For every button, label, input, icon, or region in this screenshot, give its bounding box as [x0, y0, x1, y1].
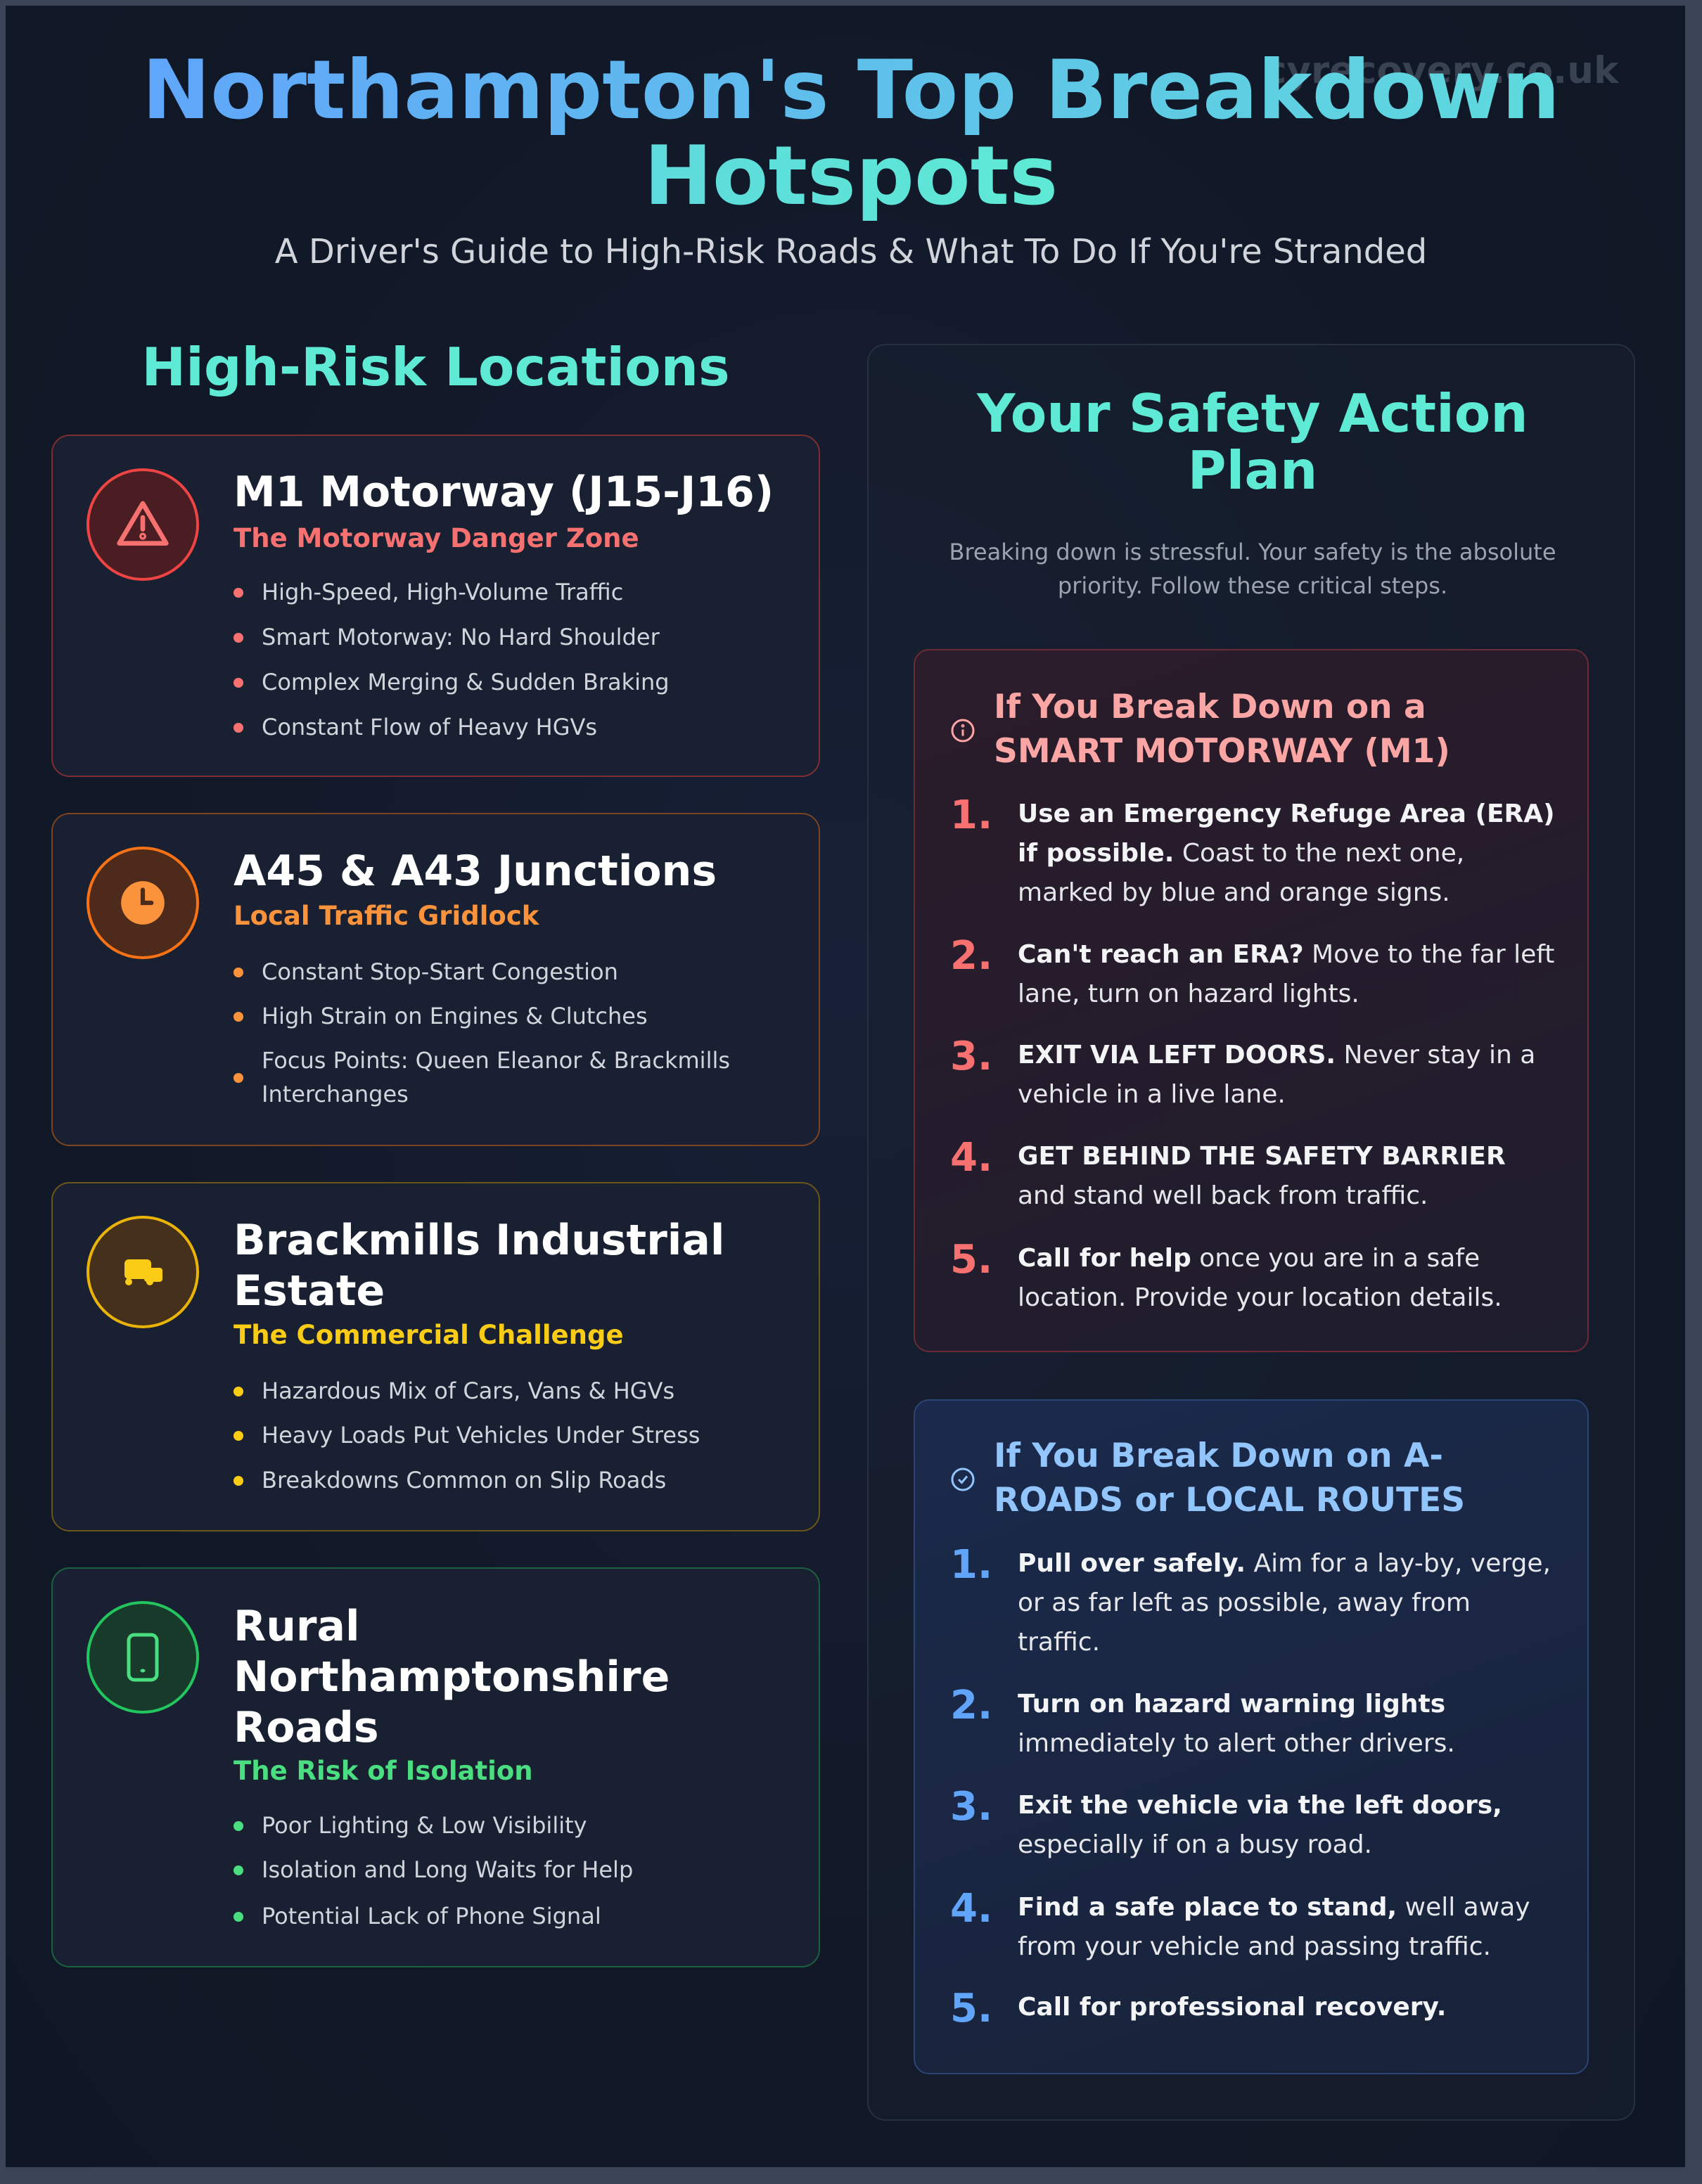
heading: safety plan: Plan	[1188, 439, 1317, 501]
panel: A-roads steps: Turn on hazard warning lights immediately to alert other drivers.	[1018, 1690, 1455, 1758]
description: Breaking down is stressful. Your safety is the absolute priority. Follow these critical steps.	[949, 539, 1556, 599]
panel: A45 & A43	[51, 813, 820, 1146]
panel: A-roads steps: Call for professional recovery.	[1018, 1993, 1446, 2022]
subtitle: A Driver's Guide to High-Risk Roads & What To Do If You're Stranded	[275, 232, 1427, 271]
card title: Brackmills Industrial Estate	[233, 1216, 724, 1316]
panel: A-roads steps: 1.	[950, 1542, 992, 1588]
icon: clock	[87, 847, 199, 959]
panel: M1 motorway	[51, 435, 820, 777]
icon: truck	[87, 1216, 199, 1328]
panel: Brackmills: Hazardous Mix of Cars, Vans & HGVs	[262, 1377, 674, 1404]
panel: Brackmills: Heavy Loads Put Vehicles Under Stress	[262, 1422, 700, 1448]
steps list	[950, 1542, 1551, 2031]
panel: A-roads steps: 2.	[950, 1683, 992, 1728]
panel: Rural roads	[51, 1567, 820, 1967]
panel: smart motorway steps	[914, 649, 1589, 1352]
panel: A-roads steps: 5.	[950, 1986, 992, 2031]
panel: A-roads steps: Find a safe place to stand, well away from your vehicle and passing traffic.	[1018, 1893, 1530, 1961]
steps list	[950, 792, 1555, 1312]
panel: smart motorway steps: Call for help once you are in a safe location. Provide your location details.	[1018, 1244, 1502, 1312]
card subtitle: The Motorway Danger Zone	[233, 523, 639, 553]
card subtitle: The Risk of Isolation	[233, 1756, 533, 1786]
bullet list	[233, 1377, 700, 1494]
heading: high-risk locations: High-Risk Locations	[141, 336, 730, 398]
panel: smart motorway steps: GET BEHIND THE SAFETY BARRIER and stand well back from traffic.	[1018, 1142, 1506, 1210]
title: Hotspots	[644, 129, 1058, 224]
panel: smart motorway steps: EXIT VIA LEFT DOORS. Never stay in a vehicle in a live lane.	[1018, 1041, 1535, 1109]
card subtitle: The Commercial Challenge	[233, 1320, 624, 1350]
panel: smart motorway steps: 5.	[950, 1237, 992, 1283]
card title: A45 & A43 Junctions	[233, 847, 717, 896]
panel: Rural roads: Potential Lack of Phone Signal	[262, 1903, 601, 1929]
icon: info	[951, 719, 975, 743]
card title: Rural Northamptonshire Roads	[233, 1602, 670, 1752]
panel: smart motorway steps: 2.	[950, 933, 992, 979]
panel: Rural roads: Poor Lighting & Low Visibility	[262, 1812, 587, 1839]
panel: M1 motorway: Complex Merging & Sudden Braking	[262, 669, 670, 695]
panel: smart motorway steps: 1.	[950, 792, 992, 838]
panel: A-roads steps	[914, 1399, 1589, 2074]
card title: M1 Motorway (J15-J16)	[233, 468, 774, 517]
title	[142, 43, 1560, 224]
panel: A-roads steps: 4.	[950, 1886, 992, 1932]
icon: check circle	[951, 1468, 975, 1491]
panel: A45 & A43: Focus Points: Queen Eleanor & Brackmills Interchanges	[262, 1047, 730, 1107]
panel: A-roads steps: Exit the vehicle via the left doors, especially if on a busy road.	[1018, 1791, 1502, 1859]
title: Northampton's Top Breakdown	[142, 43, 1560, 138]
panel: A-roads steps: 3.	[950, 1784, 992, 1830]
box heading: If You Break Down on a SMART MOTORWAY (M1)	[994, 688, 1450, 771]
panel: M1 motorway: Constant Flow of Heavy HGVs	[262, 714, 597, 740]
panel: A45 & A43: Constant Stop-Start Congestion	[262, 958, 618, 985]
panel: M1 motorway: High-Speed, High-Volume Traffic	[262, 579, 623, 605]
box heading: If You Break Down on A-ROADS or LOCAL ROUTES	[994, 1437, 1465, 1520]
card subtitle: Local Traffic Gridlock	[233, 901, 539, 931]
bullet list	[233, 579, 670, 740]
panel: smart motorway steps: 3.	[950, 1034, 992, 1079]
bullet list	[233, 958, 730, 1107]
panel: safety action plan	[867, 344, 1635, 2121]
panel: A45 & A43: High Strain on Engines & Clutches	[262, 1003, 648, 1029]
panel: smart motorway steps: Use an Emergency Refuge Area (ERA) if possible. Coast to the next one, marked by blue and orange signs.	[1018, 799, 1555, 907]
panel: Rural roads: Isolation and Long Waits for Help	[262, 1856, 633, 1883]
panel: smart motorway steps: Can't reach an ERA? Move to the far left lane, turn on hazard lights.	[1018, 940, 1554, 1008]
panel: Brackmills: Breakdowns Common on Slip Roads	[262, 1467, 666, 1494]
panel: smart motorway steps: 4.	[950, 1135, 992, 1181]
panel: Brackmills	[51, 1182, 820, 1531]
panel: A-roads steps: Pull over safely. Aim for a lay-by, verge, or as far left as possible, away from traffic.	[1018, 1549, 1551, 1657]
heading: safety plan	[976, 383, 1528, 501]
panel: M1 motorway: Smart Motorway: No Hard Shoulder	[262, 624, 660, 650]
icon: warning	[87, 468, 199, 581]
bullet list	[233, 1812, 633, 1929]
watermark: cyrecovery.co.uk	[1265, 49, 1618, 92]
heading: safety plan: Your Safety Action	[977, 383, 1528, 444]
icon: phone	[87, 1601, 199, 1714]
